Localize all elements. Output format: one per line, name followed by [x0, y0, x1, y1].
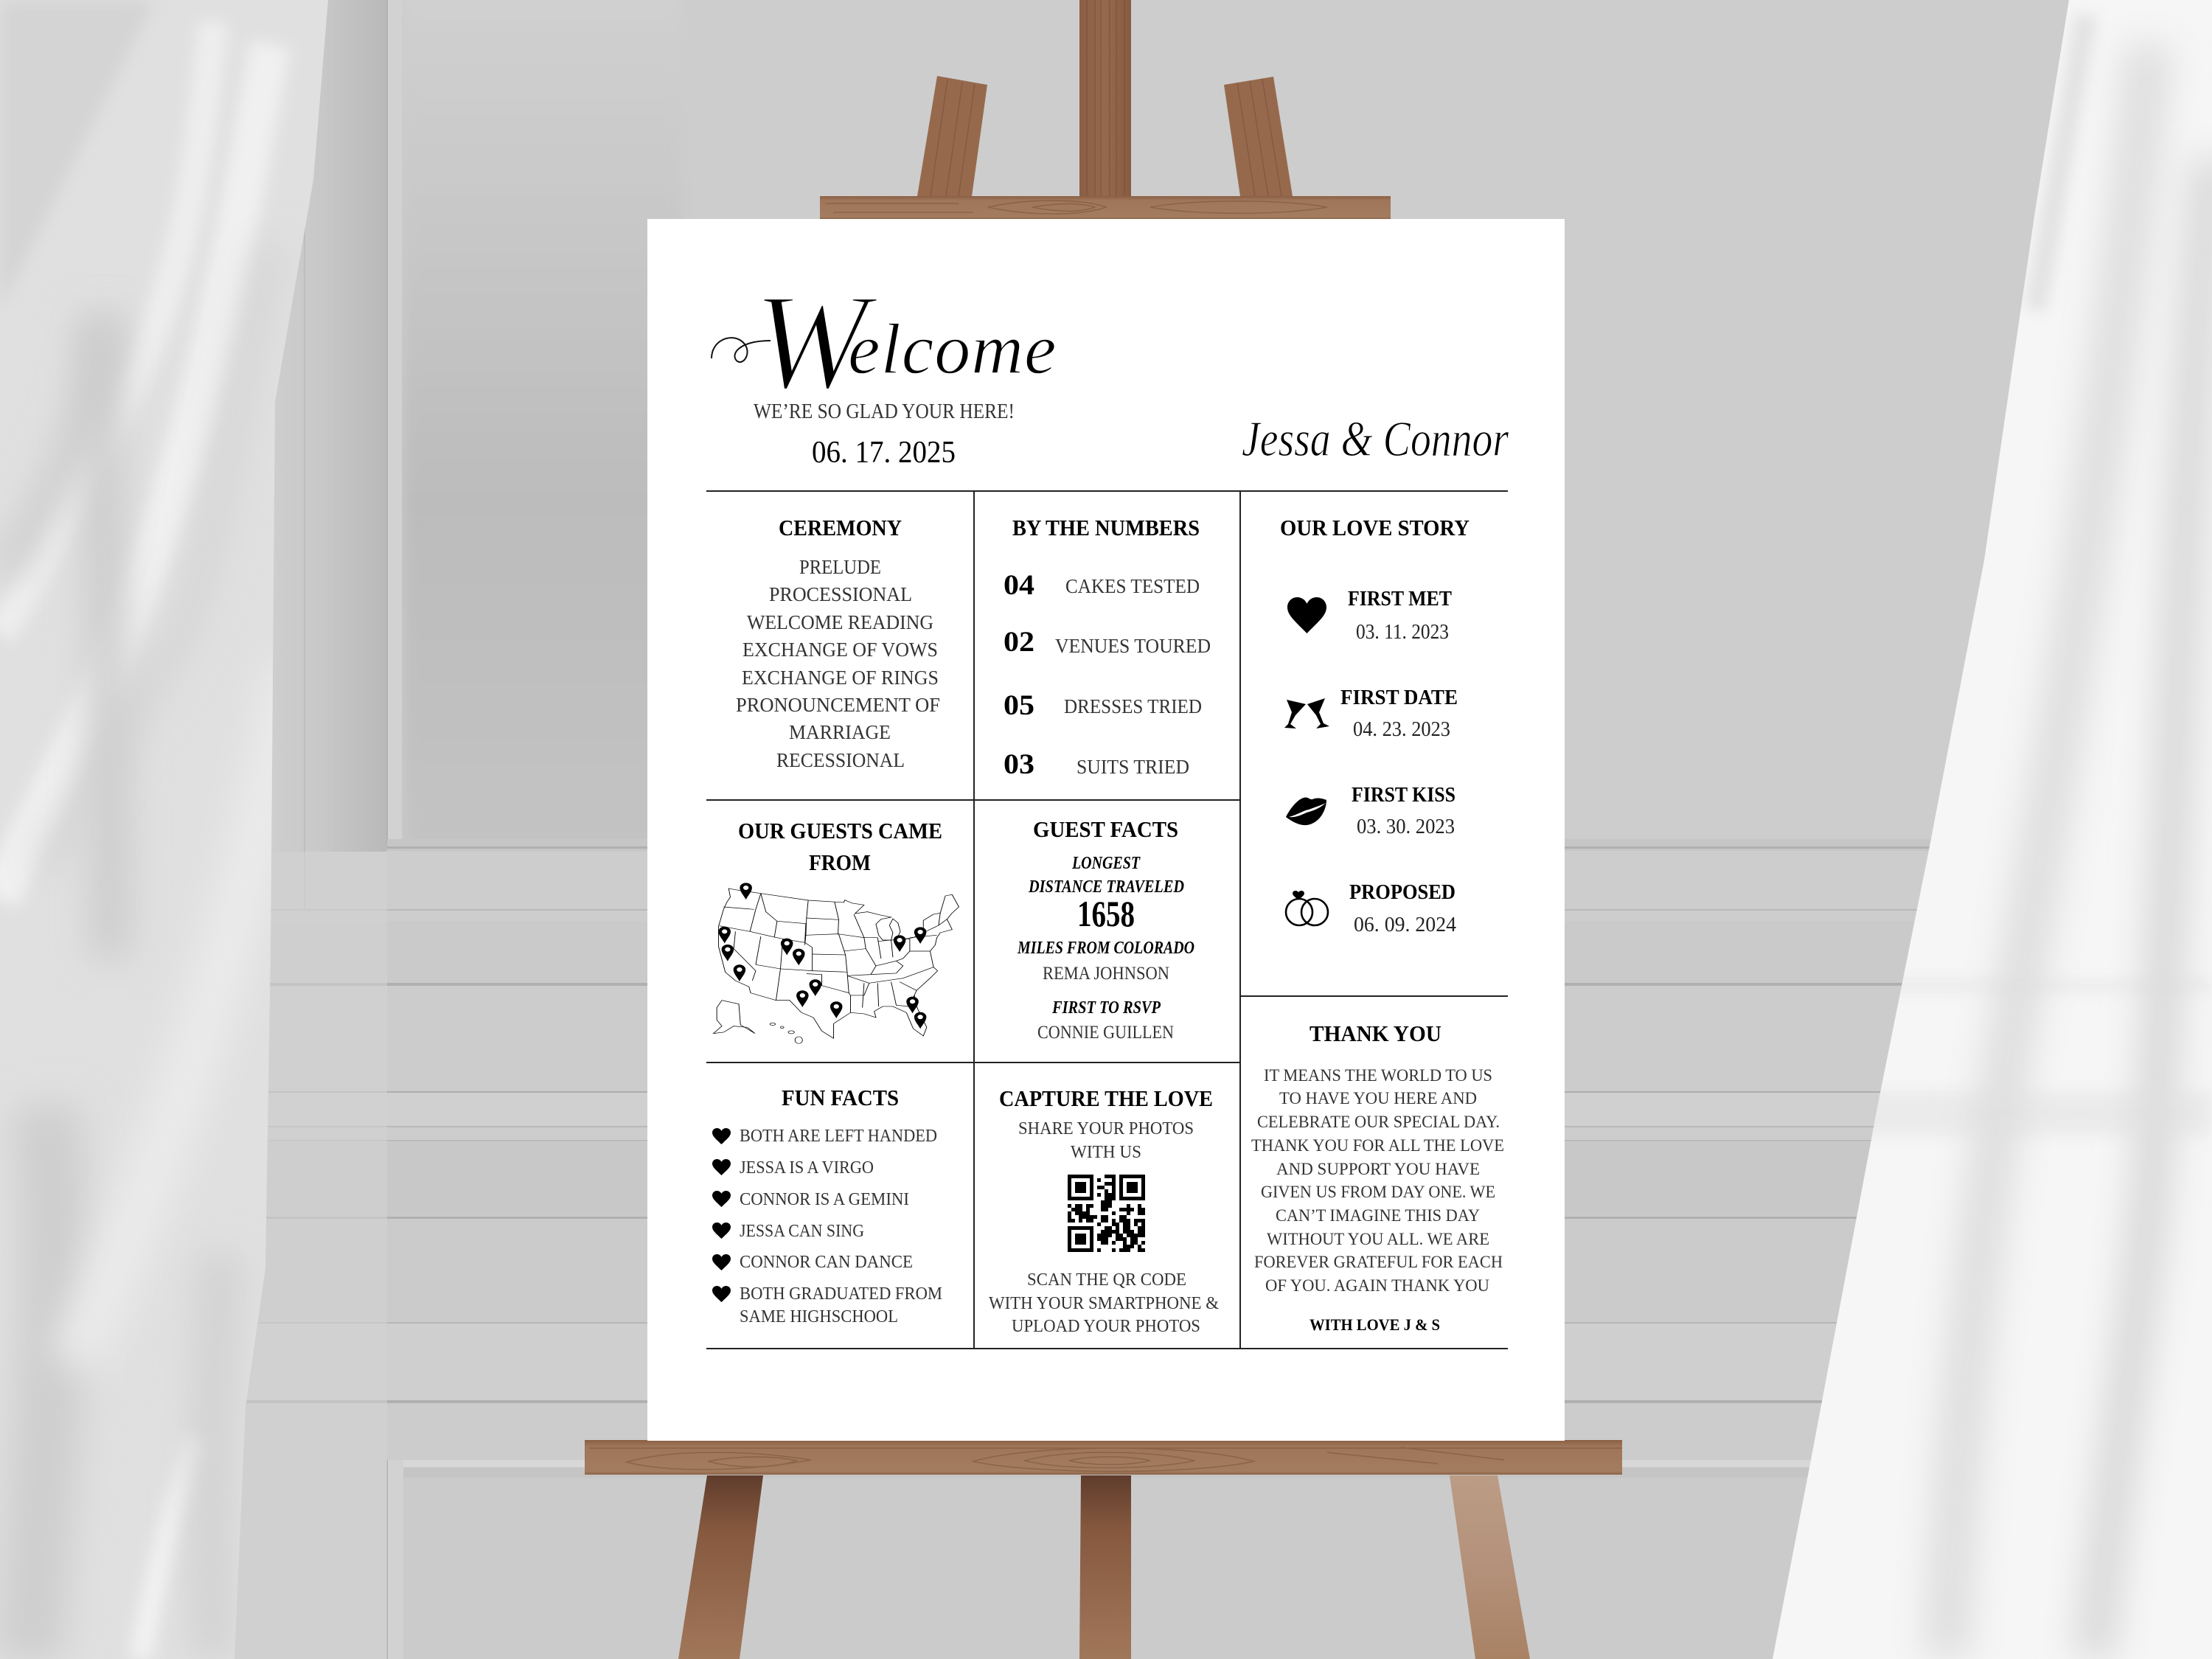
icon: rings [1286, 891, 1328, 925]
title: Welcome: W [754, 266, 868, 418]
milestone: first date: 04. 23. 2023 [1353, 717, 1450, 741]
heading: ceremony: CEREMONY [779, 515, 902, 540]
ceremony order list: EXCHANGE OF VOWS [742, 639, 938, 661]
milestone: proposed: 06. 09. 2024 [1354, 913, 1456, 936]
fact: longest distance traveled: LONGEST [1071, 854, 1141, 873]
icon: lips [1286, 798, 1326, 825]
ceremony order list: PROCESSIONAL [769, 583, 912, 605]
heading: capture the love: CAPTURE THE LOVE [999, 1085, 1213, 1111]
fun fact list with hearts: SAME HIGHSCHOOL [740, 1307, 898, 1326]
subtitle: WE’RE SO GLAD YOUR HERE! [754, 400, 1015, 423]
ceremony order list: EXCHANGE OF RINGS [742, 667, 939, 689]
easel left leg [678, 1475, 763, 1659]
milestone: first met: FIRST MET [1348, 588, 1452, 611]
share text: WITH US [1071, 1143, 1141, 1162]
ceremony order list [736, 556, 940, 771]
thank you message: GIVEN US FROM DAY ONE. WE [1261, 1183, 1495, 1201]
thank you message: FOREVER GRATEFUL FOR EACH [1254, 1253, 1503, 1271]
fact: longest distance traveled: 1658 [1077, 893, 1135, 934]
heading: guest facts: GUEST FACTS [1033, 816, 1178, 842]
easel top ledge [820, 196, 1391, 219]
scan instructions: SCAN THE QR CODE [1027, 1270, 1186, 1290]
title: Welcome: elcome [848, 310, 1057, 389]
thank you message: TO HAVE YOU HERE AND [1279, 1089, 1477, 1107]
stat: suits tried [1004, 748, 1189, 780]
panel: capture the love [989, 1085, 1219, 1336]
panel: thank you [1251, 1020, 1504, 1334]
QR code [1068, 1177, 1145, 1251]
stat: venues toured [1004, 626, 1211, 658]
fun fact list with hearts [712, 1127, 942, 1326]
scan instructions [989, 1270, 1219, 1336]
wedding date: 06. 17. 2025 [812, 436, 956, 470]
fact: first to RSVP [1037, 998, 1174, 1043]
panel: ceremony [736, 515, 940, 771]
easel right leg [1450, 1475, 1530, 1659]
milestone: first met [1287, 588, 1452, 644]
panel: guest facts [1017, 816, 1194, 1043]
title: Welcome [712, 266, 1057, 418]
panel: fun facts [712, 1085, 942, 1326]
fact: first to RSVP: CONNIE GUILLEN [1037, 1023, 1174, 1043]
stat: cakes tested: CAKES TESTED [1065, 575, 1200, 597]
fact: first to RSVP: FIRST TO RSVP [1051, 998, 1161, 1018]
milestone: first kiss: FIRST KISS [1352, 784, 1455, 807]
easel bottom ledge [585, 1440, 1622, 1475]
ceremony order list: WELCOME READING [747, 611, 933, 633]
grid lines [706, 491, 1508, 1349]
thank you message: IT MEANS THE WORLD TO US [1264, 1066, 1492, 1085]
stat: cakes tested: 04 [1004, 569, 1034, 601]
heading: thank you: THANK YOU [1310, 1020, 1441, 1046]
heading: fun facts: FUN FACTS [782, 1085, 899, 1110]
fact: longest distance traveled: MILES FROM COLORADO [1017, 939, 1194, 958]
scan instructions: UPLOAD YOUR PHOTOS [1012, 1317, 1200, 1336]
stat: dresses tried: DRESSES TRIED [1064, 695, 1202, 717]
ceremony order list: MARRIAGE [789, 721, 891, 743]
fun fact list with hearts: BOTH GRADUATED FROM [740, 1284, 942, 1304]
right white curtain [1755, 0, 2212, 1659]
fun fact list with hearts: CONNOR IS A GEMINI [740, 1190, 909, 1209]
panel: our guests came from [714, 818, 959, 1043]
milestone: first met: 03. 11. 2023 [1356, 620, 1449, 644]
share text [1018, 1119, 1194, 1162]
scan instructions: WITH YOUR SMARTPHONE & [989, 1294, 1219, 1313]
easel [585, 0, 1622, 1659]
fun fact list with hearts: BOTH ARE LEFT HANDED [740, 1127, 937, 1146]
fact: longest distance traveled: DISTANCE TRAVELED [1028, 877, 1184, 897]
fun fact list with hearts: JESSA CAN SING [740, 1222, 864, 1241]
map pins [718, 883, 926, 1029]
milestone: first kiss: 03. 30. 2023 [1357, 815, 1455, 838]
panel: by the numbers [1004, 515, 1211, 780]
stat: suits tried: 03 [1004, 748, 1034, 780]
thank you message: CELEBRATE OUR SPECIAL DAY. [1257, 1113, 1500, 1131]
thank you message [1251, 1066, 1504, 1295]
thank you message: OF YOU. AGAIN THANK YOU [1265, 1276, 1489, 1295]
heading: our love story: OUR LOVE STORY [1280, 515, 1470, 540]
left sheer curtain [0, 0, 339, 1659]
easel right peg [1224, 77, 1293, 196]
heading: our guests came from: OUR GUESTS CAME [738, 818, 942, 844]
sign-off: WITH LOVE J & S [1310, 1315, 1440, 1334]
stat: dresses tried: 05 [1004, 689, 1034, 721]
icon: heart [1287, 597, 1326, 633]
US map with location pins [714, 883, 959, 1043]
ceremony order list: PRONOUNCEMENT OF [736, 694, 940, 716]
stat: venues toured: 02 [1004, 626, 1034, 658]
fun fact list with hearts: JESSA IS A VIRGO [740, 1158, 874, 1178]
panel: our love story [1280, 515, 1470, 936]
easel mast [1079, 0, 1131, 197]
poster board [647, 219, 1565, 1441]
couple names: Jessa & Connor [1242, 411, 1509, 467]
stat: venues toured: VENUES TOURED [1055, 635, 1211, 657]
fact: longest distance traveled [1017, 854, 1194, 984]
milestone: first date: FIRST DATE [1340, 686, 1458, 709]
stat: cakes tested [1004, 569, 1200, 601]
share text: SHARE YOUR PHOTOS [1018, 1119, 1194, 1138]
ceremony order list: PRELUDE [799, 556, 881, 578]
stat: dresses tried [1004, 689, 1202, 721]
easel left peg [917, 76, 987, 196]
heading: by the numbers: BY THE NUMBERS [1012, 515, 1200, 540]
icon: champagne glasses [1284, 698, 1329, 728]
easel centre leg [1079, 1475, 1131, 1659]
map: US outline and states [714, 888, 959, 1043]
ceremony order list: RECESSIONAL [776, 749, 905, 771]
heading: our guests came from: FROM [809, 849, 871, 875]
heading: our guests came from [738, 818, 942, 875]
milestone: proposed [1286, 881, 1456, 936]
fun fact list with hearts: CONNOR CAN DANCE [740, 1253, 913, 1272]
milestone: proposed: PROPOSED [1349, 881, 1455, 904]
thank you message: WITHOUT YOU ALL. WE ARE [1267, 1230, 1489, 1248]
fact: longest distance traveled: REMA JOHNSON [1043, 964, 1169, 984]
stat: suits tried: SUITS TRIED [1077, 756, 1189, 778]
thank you message: AND SUPPORT YOU HAVE [1276, 1160, 1480, 1178]
milestone: first kiss [1286, 784, 1455, 838]
thank you message: THANK YOU FOR ALL THE LOVE [1251, 1136, 1504, 1155]
thank you message: CAN’T IMAGINE THIS DAY [1276, 1206, 1480, 1225]
milestone: first date [1284, 686, 1458, 741]
